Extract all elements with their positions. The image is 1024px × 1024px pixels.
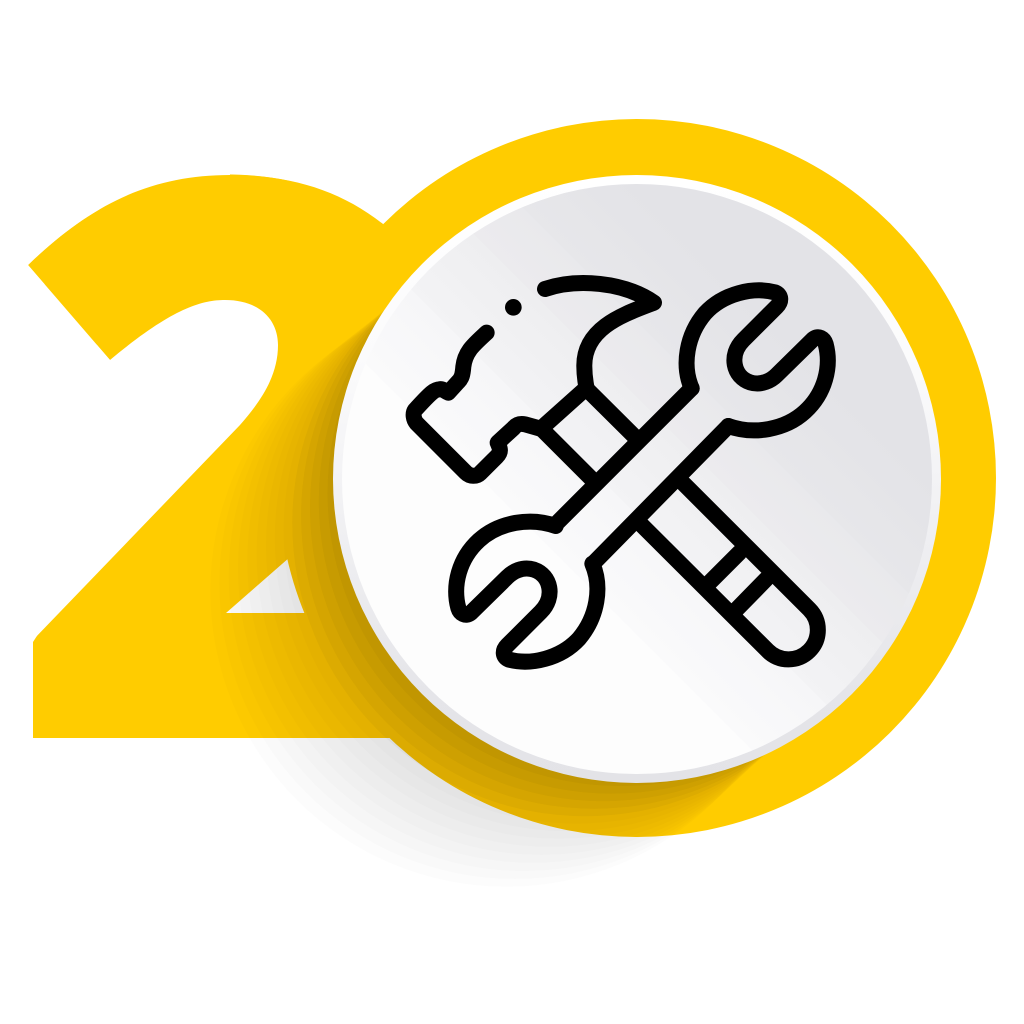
- icon: wrench: [456, 290, 828, 662]
- white disc: [333, 175, 941, 783]
- icon: hammer and wrench: [414, 283, 828, 662]
- drop shadow of the disc: [210, 200, 914, 887]
- icon: hammer head and claw: [414, 283, 654, 476]
- yellow ring forming the 0: [278, 119, 996, 837]
- icon: hammer handle: [542, 388, 818, 659]
- numeral 2: 2: [7, 18, 446, 900]
